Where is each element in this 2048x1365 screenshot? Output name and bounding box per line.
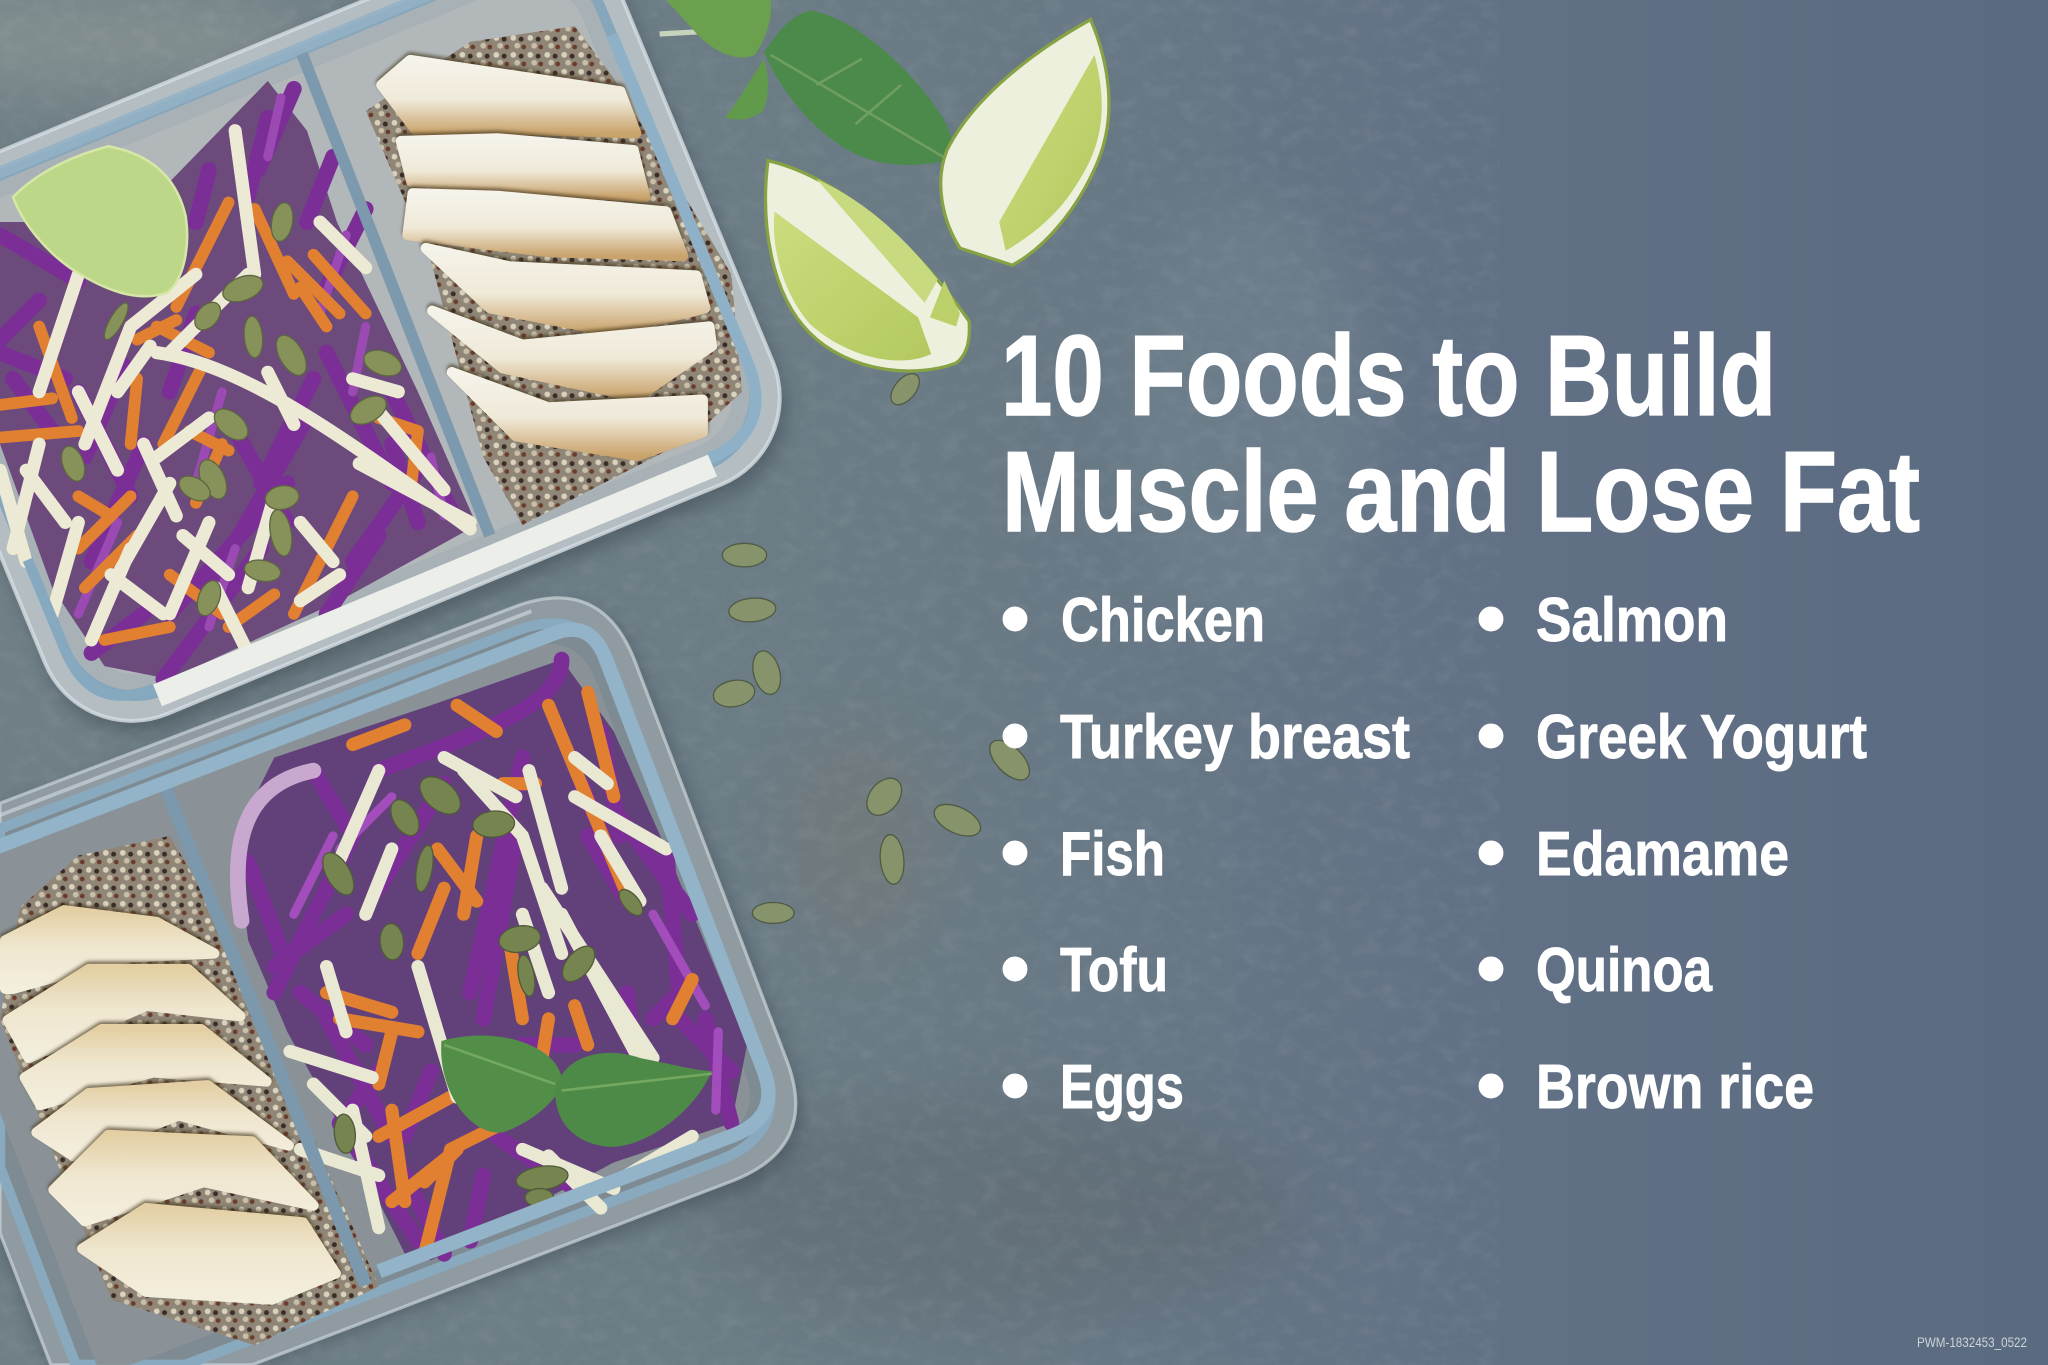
basil sprig: top right	[660, 0, 953, 165]
quinoa: bottom container	[0, 836, 379, 1345]
list item: Chicken: Chicken	[1061, 586, 1265, 655]
glass shell: bottom container	[0, 598, 796, 1365]
list item: Salmon	[1479, 586, 1728, 655]
document code: PWM-1832453_0522	[1917, 1334, 2027, 1350]
list item: Fish	[1003, 820, 1165, 889]
list item: Greek Yogurt: Greek Yogurt	[1536, 703, 1867, 772]
list item: Fish: Fish	[1060, 820, 1165, 889]
white glass rim: top container	[0, 0, 779, 721]
lime wedge: left	[766, 161, 969, 371]
title	[1001, 313, 1920, 556]
pale leaf garnish: top container	[13, 146, 187, 296]
list item: Quinoa	[1479, 936, 1712, 1005]
meal prep container: top	[0, 0, 814, 760]
quinoa: top container	[366, 26, 742, 525]
pumpkin seeds in slaw: top container	[57, 201, 405, 619]
list item: Eggs: Eggs	[1060, 1053, 1184, 1122]
title line 1: 10 Foods to Build	[1001, 313, 1776, 440]
list item: Tofu	[1003, 936, 1168, 1005]
list item: Chicken	[1003, 586, 1265, 655]
food photograph scene	[0, 0, 1109, 1365]
glass divider: bottom container	[166, 788, 366, 1285]
list item: Tofu: Tofu	[1060, 936, 1168, 1005]
lime wedge: right	[941, 20, 1109, 265]
list item: Edamame: Edamame	[1536, 820, 1789, 889]
list item: Salmon: Salmon	[1536, 586, 1728, 655]
chicken slices: top container	[381, 60, 712, 456]
cabbage slaw: bottom container	[235, 660, 747, 1260]
glass rim: bottom container	[0, 592, 781, 1365]
chicken slices: bottom container	[5, 910, 336, 1300]
list item: Quinoa: Quinoa	[1536, 936, 1712, 1005]
scattered pumpkin seeds	[711, 368, 1036, 923]
list item: Brown rice: Brown rice	[1536, 1053, 1814, 1122]
food list: right column	[1479, 586, 1867, 1122]
list item: Eggs	[1003, 1053, 1184, 1122]
pumpkin seeds in slaw: bottom container	[316, 769, 647, 1207]
food list: left column	[1003, 586, 1410, 1122]
list item: Turkey breast: Turkey breast	[1060, 703, 1410, 772]
glass shell: top container	[0, 0, 809, 750]
glass divider: top container	[300, 50, 490, 536]
cabbage slaw: top container	[0, 81, 477, 679]
basil leaves: bottom container	[441, 1035, 712, 1147]
meal prep container: bottom	[0, 592, 801, 1365]
